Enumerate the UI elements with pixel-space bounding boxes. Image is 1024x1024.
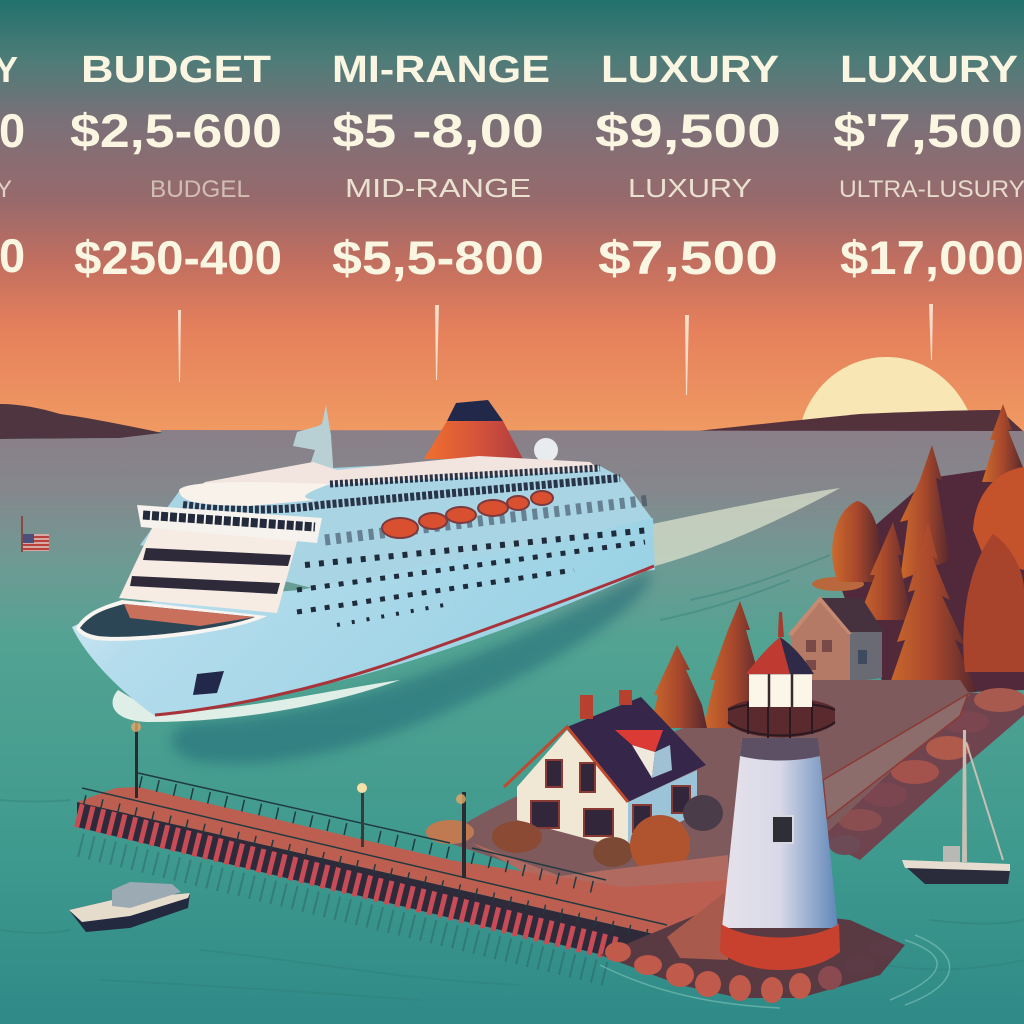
anchor hatch bbox=[193, 671, 224, 695]
shoreline rocks right bbox=[820, 688, 1024, 860]
column: ultra-luxury: ULTRA-LUSURY bbox=[839, 176, 1024, 203]
tree far right bbox=[982, 404, 1024, 482]
dormer bbox=[615, 730, 663, 752]
small flag bbox=[21, 516, 49, 552]
rounded tree bbox=[973, 467, 1024, 570]
tree bbox=[650, 645, 707, 728]
wake behind ship bbox=[652, 488, 840, 566]
column: budget: BUDGEL bbox=[150, 176, 250, 203]
trees behind cottage bbox=[650, 601, 763, 728]
column: mid-range: MID-RANGE bbox=[345, 173, 531, 203]
tree right front bbox=[963, 534, 1024, 672]
second window band bbox=[183, 478, 620, 510]
pale vertical light streaks bbox=[178, 304, 933, 395]
column: ultra-luxury: LUXURY bbox=[840, 49, 1018, 91]
front wall bbox=[517, 730, 628, 850]
cruise ship bbox=[72, 400, 655, 722]
tower shadow band bbox=[740, 738, 820, 760]
sea background bbox=[0, 430, 1024, 1024]
upper superstructure bbox=[140, 463, 655, 590]
shrubs bbox=[426, 795, 723, 875]
ship shadow on water bbox=[171, 570, 651, 764]
tree tall bbox=[900, 445, 950, 580]
pier bbox=[77, 773, 728, 975]
column: mid-range bbox=[332, 49, 550, 284]
price table text bbox=[0, 49, 1024, 284]
column: mid-range: $5,5-800 bbox=[332, 231, 544, 284]
chimneys bbox=[580, 695, 593, 719]
tree bbox=[703, 601, 763, 728]
sun deck bbox=[190, 456, 600, 494]
column: ultra-luxury: $17,000 bbox=[840, 231, 1024, 284]
gallery bbox=[728, 698, 835, 738]
column: budget bbox=[70, 49, 282, 284]
distant island left bbox=[0, 404, 162, 439]
side wall bbox=[628, 770, 697, 850]
lighthouse tower bbox=[722, 738, 838, 928]
lamp posts bbox=[131, 722, 466, 878]
base band bbox=[720, 924, 840, 970]
column: budget: $250-400 bbox=[74, 231, 282, 284]
motor boat bbox=[69, 882, 190, 932]
column: budget: $2,5-600 bbox=[70, 104, 282, 157]
cap bbox=[746, 637, 814, 674]
radar dome bbox=[534, 438, 558, 462]
cottage bbox=[504, 690, 706, 850]
bow foam bbox=[113, 680, 400, 722]
column: luxury: $7,500 bbox=[598, 231, 778, 284]
distant shore right bbox=[697, 410, 1024, 432]
mid window band bbox=[325, 500, 650, 540]
mast bbox=[293, 405, 334, 480]
column: luxury: $9,500 bbox=[595, 104, 781, 157]
pier post backing bbox=[77, 802, 667, 957]
far shore spit bbox=[812, 577, 864, 591]
roof bbox=[567, 697, 706, 802]
column: ultra-luxury: $'7,500 bbox=[833, 104, 1023, 157]
funnel bbox=[424, 400, 523, 459]
wooden platform bbox=[667, 890, 728, 960]
rocks bbox=[605, 939, 901, 1003]
column: luxury: LUXURY bbox=[628, 173, 752, 203]
pier posts bbox=[77, 815, 620, 950]
sky background bbox=[0, 0, 1024, 432]
lantern room bbox=[749, 673, 812, 707]
top window band bbox=[330, 468, 600, 484]
tree cluster right bbox=[832, 404, 1024, 692]
hull red stripe bbox=[155, 566, 654, 715]
column: mid-range: MI-RANGE bbox=[332, 49, 550, 91]
top white roof bbox=[179, 482, 330, 506]
ground path to lighthouse bbox=[472, 843, 728, 930]
land behind cottage bbox=[440, 680, 970, 945]
tree bbox=[832, 501, 881, 582]
bow well bbox=[76, 600, 267, 641]
forward decks bbox=[119, 526, 298, 613]
rock base bbox=[600, 905, 905, 998]
pier deck bbox=[77, 787, 728, 937]
lighthouse bbox=[600, 612, 905, 1003]
column 0 partial bbox=[0, 49, 25, 282]
rails bbox=[82, 773, 667, 937]
column: mid-range: $5 -8,00 bbox=[332, 104, 544, 157]
column: ultra-luxury bbox=[833, 49, 1024, 284]
column: luxury bbox=[595, 49, 781, 284]
post reflection bbox=[80, 845, 610, 975]
hull bbox=[72, 518, 654, 716]
ripple marks near lighthouse bbox=[600, 935, 950, 1008]
column: luxury: LUXURY bbox=[601, 49, 779, 91]
water ripples bbox=[0, 555, 1024, 1000]
tree mid bbox=[858, 522, 912, 620]
windows bbox=[531, 760, 690, 836]
far house bbox=[788, 596, 884, 682]
brow deck with windows bbox=[137, 505, 322, 543]
dark forest backdrop bbox=[840, 470, 1024, 695]
window rows bbox=[305, 530, 649, 565]
column: budget: BUDGET bbox=[81, 49, 271, 91]
tree large front bbox=[887, 522, 977, 692]
lifeboats bbox=[382, 491, 553, 538]
spire bbox=[778, 612, 784, 637]
window bbox=[772, 816, 793, 843]
sun bbox=[802, 357, 972, 420]
sailboat bbox=[902, 730, 1010, 884]
eaves bbox=[504, 727, 628, 802]
walkway bbox=[823, 694, 968, 819]
